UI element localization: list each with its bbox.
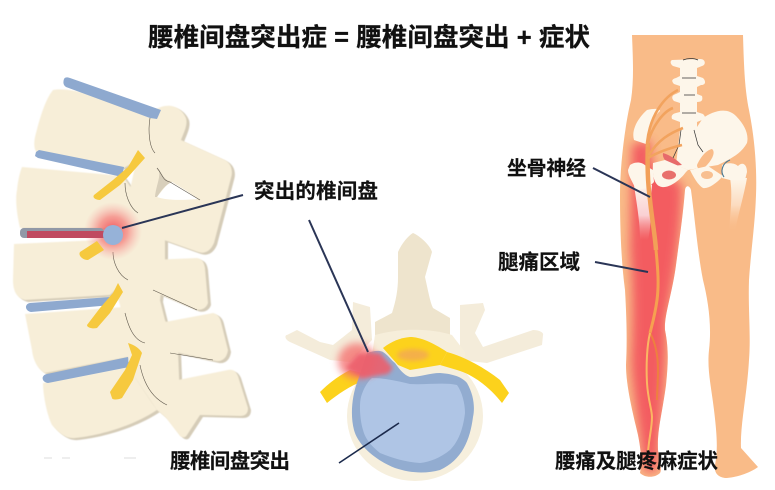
yellow nerve root 1 bbox=[93, 150, 145, 200]
nerve root right bbox=[440, 352, 509, 403]
pubis left ring bbox=[653, 160, 688, 187]
inner red bbox=[346, 353, 393, 378]
red pain region bbox=[630, 140, 682, 472]
lower trunk bbox=[650, 250, 658, 333]
skin silhouette bbox=[620, 35, 758, 478]
left femur head bbox=[628, 162, 654, 190]
right femur head bbox=[722, 163, 747, 180]
red compressed disc core bbox=[27, 231, 104, 238]
side view of lumbar spine bbox=[13, 77, 251, 440]
spinous process bbox=[375, 233, 450, 335]
protruding disc with glow bbox=[20, 202, 142, 260]
label: disc herniation: 腰椎间盘突出 bbox=[170, 449, 290, 473]
sciatic nerve trunk bbox=[648, 143, 656, 250]
label: sciatic nerve: 坐骨神经 bbox=[507, 157, 586, 180]
left hip opening red bbox=[663, 153, 682, 166]
specks bbox=[44, 457, 136, 459]
leader: sciatic nerve bbox=[593, 168, 650, 197]
inflammation bbox=[338, 343, 393, 379]
nerve sac bbox=[383, 337, 447, 370]
disc L5 bbox=[43, 357, 129, 383]
disc outer annulus bbox=[352, 351, 474, 472]
body: legs and pelvis bbox=[620, 35, 758, 478]
left ilium bbox=[633, 109, 660, 144]
upper window between processes bbox=[157, 182, 198, 200]
vertebral body rim bbox=[347, 351, 483, 481]
leader: herniated disc bbox=[122, 195, 243, 228]
right femur shaft bbox=[729, 178, 747, 232]
disc L4 bbox=[26, 297, 112, 312]
pain gradient bbox=[630, 140, 682, 472]
axial view of vertebra bbox=[285, 233, 543, 481]
left femur shaft bbox=[634, 185, 652, 240]
sacroiliac skin gap bbox=[697, 149, 714, 169]
orange spot bbox=[397, 349, 429, 361]
sciatic nerve roots bbox=[647, 90, 683, 158]
label: herniated disc: 突出的椎间盘 bbox=[254, 179, 378, 203]
right transverse process bbox=[460, 303, 543, 363]
disc L1 bbox=[63, 77, 161, 119]
obturator right bbox=[701, 171, 713, 179]
obturator left bbox=[662, 170, 676, 180]
yellow nerve root 2 bbox=[79, 241, 104, 260]
fine outlines bbox=[113, 118, 213, 405]
nerve root left bbox=[320, 370, 363, 403]
yellow nerve root 4 bbox=[110, 343, 142, 400]
window shadow bbox=[155, 168, 172, 197]
blue hip joint arc bbox=[722, 160, 730, 177]
leader: leg pain area bbox=[595, 262, 648, 272]
label: leg pain area: 腿痛区域 bbox=[498, 250, 580, 274]
lower branch right bbox=[650, 333, 658, 400]
vertebral arch bbox=[370, 330, 465, 368]
lower branch left bbox=[647, 333, 652, 465]
vertebra bodies and processes bbox=[13, 89, 248, 438]
spine column bbox=[671, 59, 705, 132]
sacrum fine lines bbox=[673, 58, 703, 158]
leader: axial herniation bbox=[309, 220, 368, 352]
left transverse process bbox=[285, 302, 372, 362]
leader: disc protrusion bbox=[339, 423, 399, 463]
title: 腰椎间盘突出症 = 腰椎间盘突出 + 症状 bbox=[148, 24, 590, 52]
label: symptoms: 腰痛及腿疼麻症状 bbox=[555, 449, 718, 473]
right ilium and sacrum bbox=[676, 111, 748, 170]
bone shadow bbox=[16, 91, 251, 440]
herniated disc strip bbox=[20, 228, 104, 238]
disc nucleus bbox=[360, 378, 465, 463]
disc L2 bbox=[35, 150, 124, 177]
blue bulge bbox=[103, 225, 123, 245]
pubis right ring bbox=[690, 166, 723, 188]
red glow bbox=[84, 202, 142, 260]
outer glow bbox=[338, 343, 376, 379]
yellow nerve root 3 bbox=[87, 283, 123, 328]
